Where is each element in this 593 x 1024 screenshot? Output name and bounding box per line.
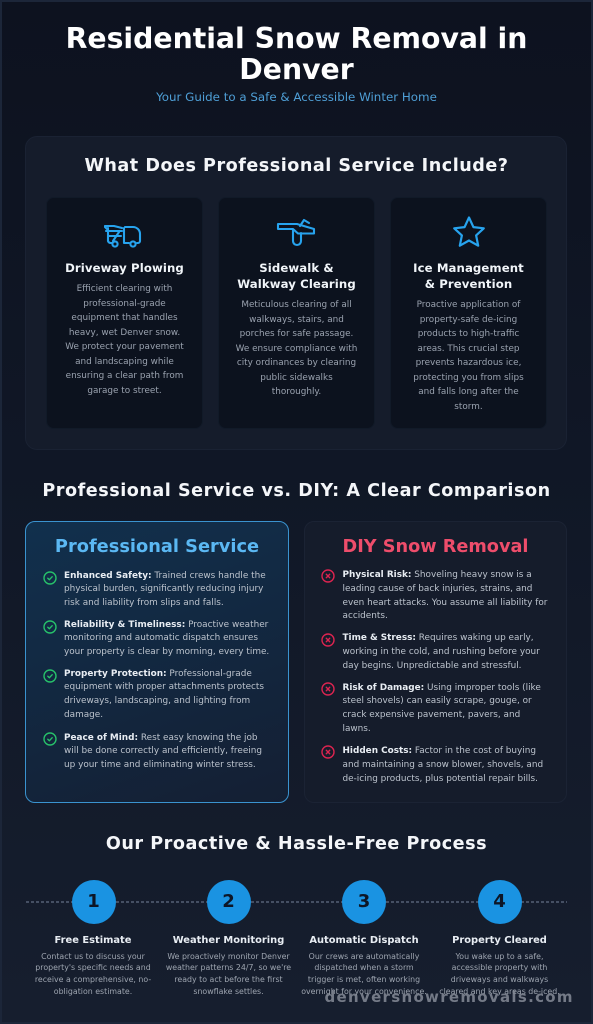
card text: areas. This crucial step [417, 344, 520, 354]
text: weather patterns 24/7, so we're [166, 963, 291, 972]
benefit: property protection: Property Protection: Professional-grade [64, 668, 252, 678]
subtitle: Your Guide to a Safe & Accessible Winter Home [156, 90, 437, 104]
card text: public sidewalks [260, 372, 333, 382]
panel: services [25, 136, 567, 450]
icon: check [43, 732, 57, 746]
drawback: physical risk: Physical Risk: Shoveling heavy snow is a [342, 570, 532, 580]
icon: plow truck [104, 225, 142, 248]
card heading: & Prevention [425, 277, 512, 291]
card text: equipment that handles [71, 313, 178, 323]
icon: check [43, 571, 57, 585]
drawback: physical risk: even heart attacks. You assume all liability for [342, 598, 547, 608]
drawback: physical risk [342, 570, 548, 621]
benefit: enhanced safety: Enhanced Safety: Trained crews handle the [64, 570, 266, 580]
professional service heading: Professional Service [55, 536, 259, 557]
text: cleared and key areas de-iced. [439, 987, 560, 996]
text: Weather Monitoring [173, 934, 284, 946]
icon: cross [321, 745, 335, 759]
step 2 number: 2 [222, 891, 235, 912]
icon: check [43, 669, 57, 683]
panel: professional service [25, 521, 289, 803]
icon: star [453, 216, 485, 247]
drawback: time and stress: day begins. Unpredictable and stressful. [342, 661, 522, 671]
card text: professional-grade [83, 298, 166, 308]
benefit: property protection: driveways, landscaping, and lighting from [64, 696, 250, 706]
card text: porches for safe passage. [240, 329, 353, 339]
benefit: property protection: equipment with proper attachments protects [64, 682, 264, 692]
text: accessible property with [452, 963, 547, 972]
drawback: time and stress: Time & Stress: Requires waking up early, [342, 633, 534, 643]
card heading [413, 261, 524, 291]
benefit: peace of mind: will be done correctly and efficiently, freeing [64, 746, 262, 756]
benefit: property protection: damage. [64, 710, 103, 720]
card text: We ensure compliance with [236, 344, 357, 354]
card heading [237, 261, 356, 291]
text: Automatic Dispatch [309, 934, 419, 946]
text: ready to act before the first [174, 975, 283, 984]
step 3 [301, 934, 427, 996]
card text: Proactive application of [417, 300, 520, 310]
step 3 number: 3 [358, 891, 370, 912]
diy heading: DIY Snow Removal [343, 537, 528, 557]
text: dispatched when a storm [314, 963, 414, 972]
icon: cross [321, 569, 335, 583]
card text: property-safe de-icing [420, 314, 517, 324]
step 4 number: 4 [493, 891, 506, 912]
text: We proactively monitor Denver [167, 952, 290, 960]
drawback: hidden costs [342, 746, 543, 784]
drawback: hidden costs: and maintaining a snow blower, shovels, and [342, 760, 543, 770]
benefit: enhanced safety [64, 570, 266, 608]
step 2 [166, 934, 291, 996]
benefit: reliability: monitoring and automatic dispatch ensures [64, 633, 258, 643]
card text: ensuring a clear path from [66, 371, 183, 381]
text: trigger is met, often working [308, 975, 420, 984]
card text: Meticulous clearing of all [241, 300, 352, 310]
card: driveway plowing [46, 197, 203, 429]
drawback: risk of damage: crack expensive pavement, pavers, and [342, 710, 520, 720]
drawback: physical risk: accidents. [342, 611, 388, 621]
step 1 number [72, 880, 116, 924]
benefit: peace of mind: up your time and eliminating winter stress. [64, 760, 256, 770]
watermark: denversnowremovals.com [324, 988, 574, 1006]
benefit: reliability [64, 620, 269, 657]
text: obligation estimate. [54, 987, 132, 996]
card text: products to high-traffic [418, 329, 519, 339]
step 2 number [206, 880, 250, 924]
heading: process: Our Proactive & Hassle-Free Process [106, 834, 487, 854]
heading: comparison: Professional Service vs. DIY: A Clear Comparison [42, 481, 551, 501]
benefit: peace of mind [64, 732, 262, 770]
card text: storm. [454, 402, 483, 412]
benefit: reliability: Reliability & Timeliness: Proactive weather [64, 620, 268, 630]
step 1 [35, 934, 151, 996]
drawback: risk of damage: steel shovels) can easily scrape, gouge, or [342, 696, 532, 706]
card text: We protect your pavement [65, 342, 184, 352]
step 3 number [342, 880, 386, 924]
card text: and falls long after the [418, 387, 519, 397]
card text: heavy, wet Denver snow. [69, 328, 180, 338]
benefit: enhanced safety: physical burden, significantly reducing injury [64, 584, 263, 594]
card: sidewalk clearing [218, 197, 375, 429]
card heading: Driveway Plowing [65, 261, 184, 275]
step 4 number [478, 880, 522, 924]
icon: cross [321, 633, 335, 647]
text: overnight for your convenience. [301, 987, 427, 996]
text: driveways and walkways [451, 975, 548, 984]
icon: shovel [276, 218, 316, 246]
panel: diy [304, 521, 567, 803]
card heading: Sidewalk & [259, 261, 334, 275]
icon: cross [321, 682, 335, 696]
drawback: hidden costs: Hidden Costs: Factor in the cost of buying [342, 746, 536, 756]
benefit: reliability: your property is clear by morning, every time. [64, 647, 269, 657]
card text: city ordinances by clearing [237, 358, 356, 368]
card text: thoroughly. [272, 387, 321, 397]
text: Property Cleared [452, 934, 547, 946]
text: Our crews are automatically [309, 952, 419, 960]
card: ice management [390, 197, 547, 429]
card text: walkways, stairs, and [249, 314, 344, 324]
drawback: time and stress [342, 633, 540, 671]
icon: check [43, 620, 57, 634]
benefit: enhanced safety: risk and liability from slips and falls. [64, 598, 224, 608]
card text: prevents hazardous ice, [416, 358, 521, 368]
drawback: time and stress: working in the cold, and rushing before your [342, 647, 540, 657]
card text: and landscaping while [75, 356, 174, 366]
card text [65, 284, 184, 396]
title: Residential Snow Removal in [66, 22, 527, 55]
card heading: Ice Management [413, 261, 524, 275]
text: snowflake settles. [193, 987, 264, 996]
step 1 number: 1 [87, 891, 100, 912]
text: You wake up to a safe, [456, 952, 543, 960]
title [66, 22, 527, 86]
heading: services: What Does Professional Service Include? [84, 156, 508, 176]
benefit: property protection [64, 668, 264, 720]
text: Free Estimate [55, 934, 131, 946]
drawback: physical risk: leading cause of back injuries, strains, and [342, 584, 532, 594]
card text [236, 300, 357, 397]
step 4 [439, 934, 560, 996]
drawback: risk of damage: lawns. [342, 724, 371, 734]
title: Denver [239, 52, 354, 86]
drawback: hidden costs: de-icing products, plus potential repair bills. [342, 774, 538, 784]
drawback: risk of damage [342, 682, 541, 734]
benefit: peace of mind: Peace of Mind: Rest easy knowing the job [64, 732, 258, 742]
text: receive a comprehensive, no- [35, 975, 151, 984]
card heading: Walkway Clearing [237, 277, 356, 291]
process connector line [26, 901, 567, 903]
card text: Efficient clearing with [77, 284, 172, 294]
drawback: risk of damage: Risk of Damage: Using improper tools (like [342, 682, 541, 692]
text: property's specific needs and [35, 963, 151, 972]
text: Contact us to discuss your [41, 952, 145, 960]
card text [413, 300, 524, 412]
card text: protecting you from slips [413, 372, 524, 382]
card text: garage to street. [87, 386, 162, 396]
